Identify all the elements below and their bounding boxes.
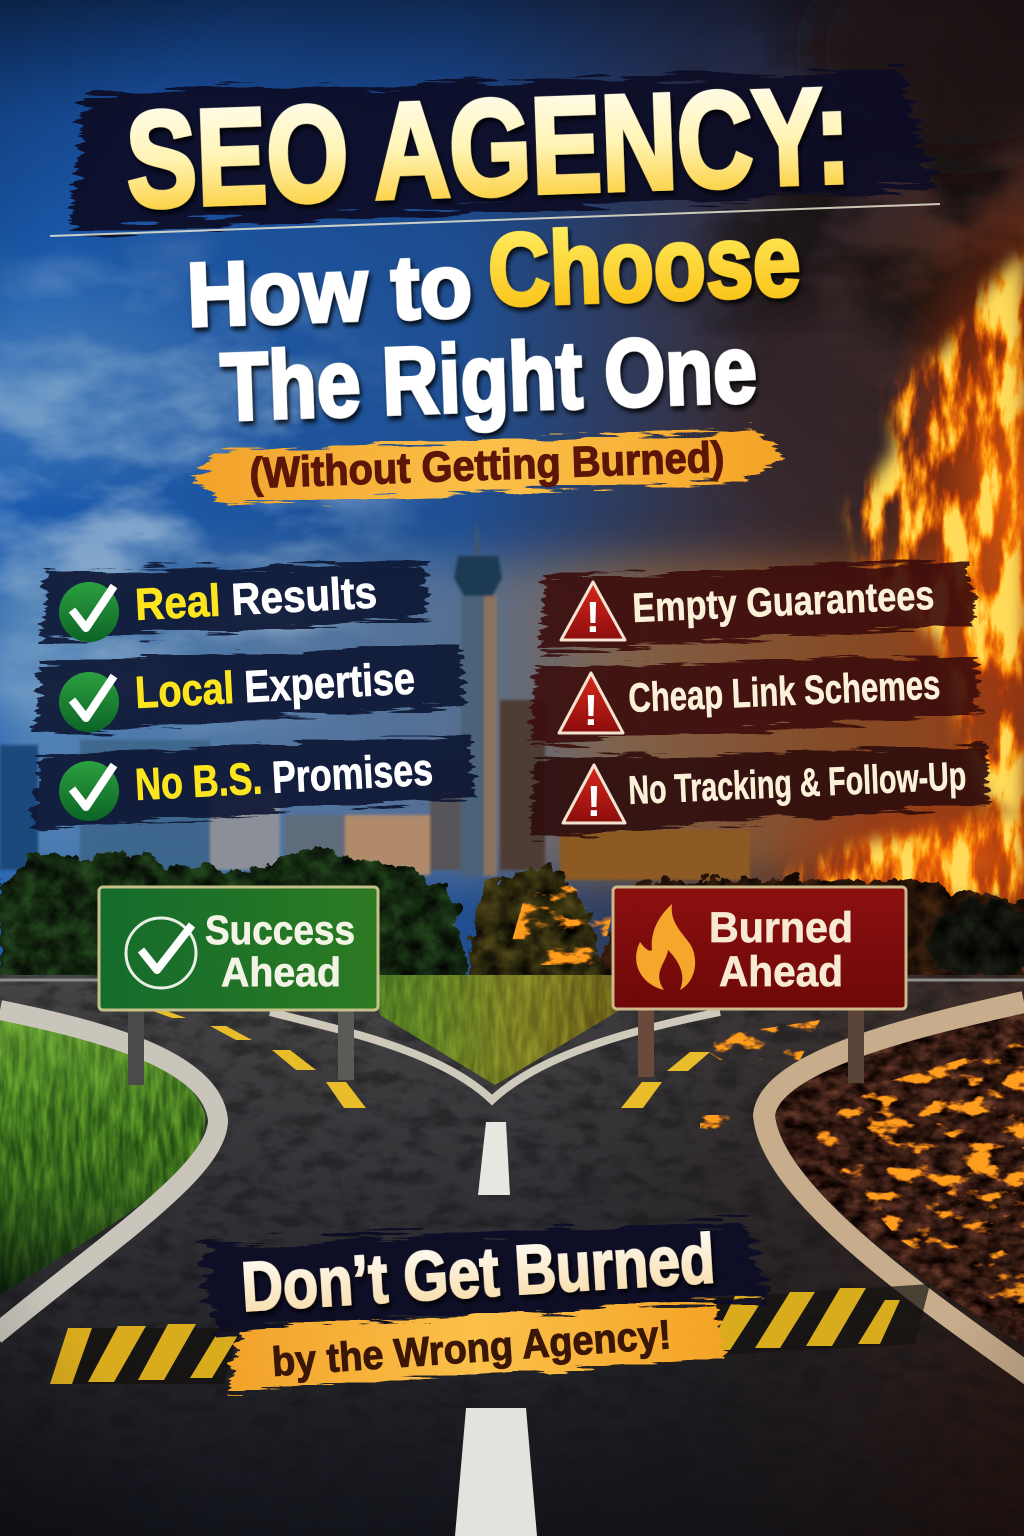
bottom ribbon: by the Wrong Agency! — [270, 1311, 673, 1385]
hazard stripes right — [700, 1284, 930, 1356]
background: split sky — [0, 0, 1024, 1000]
item: empty guarantees: Empty Guarantees — [631, 572, 935, 631]
title line 2: How to — [185, 236, 474, 346]
bottom headline: Don’t Get Burned — [239, 1219, 717, 1326]
divider stroke under title — [50, 204, 940, 236]
item: cheap link schemes: ! — [584, 686, 598, 735]
city skyline — [0, 515, 750, 880]
title line 3: The Right One — [219, 315, 758, 441]
road surface — [0, 975, 1024, 1536]
sign: success ahead — [99, 887, 378, 1085]
item: no tracking — [530, 745, 990, 838]
sign: success ahead: Ahead — [221, 949, 341, 995]
item: real results: Real Results — [134, 566, 378, 630]
item: empty guarantees — [540, 560, 975, 652]
sign: burned ahead: Ahead — [719, 948, 843, 996]
road edge lines and markings — [0, 980, 1024, 1536]
panel: warning signs — [530, 560, 990, 838]
icon: check circle — [126, 918, 196, 988]
tree line — [0, 852, 1024, 985]
sign: success ahead: Success — [205, 907, 355, 953]
panel: positive signs — [32, 562, 475, 830]
left grass verge — [0, 1012, 205, 1295]
item: no bs promises: No B.S. Promises — [134, 743, 434, 810]
hazard stripes left — [50, 1324, 240, 1384]
title line 2 — [184, 203, 802, 346]
fire wall on the right — [760, 180, 1024, 940]
sign: burned ahead — [613, 887, 906, 1083]
title banner brush — [70, 70, 935, 232]
subtitle ribbon: (Without Getting Burned) — [249, 433, 725, 498]
item: empty guarantees: ! — [586, 593, 600, 642]
title line 2: Choose — [486, 203, 802, 327]
item: no bs promises — [32, 735, 475, 830]
centre grass wedge — [372, 975, 640, 1085]
item: no tracking: ! — [587, 777, 601, 826]
item: local expertise: Local Expertise — [134, 652, 416, 718]
item: local expertise — [35, 645, 465, 735]
item: cheap link schemes — [530, 655, 980, 745]
sign: burned ahead: Burned — [709, 904, 853, 952]
item: real results — [42, 562, 428, 642]
bottom banner: dark brush — [205, 1220, 770, 1335]
right burnt ground with embers — [690, 1005, 1024, 1345]
tower — [454, 515, 502, 876]
icon: flame — [636, 904, 695, 990]
